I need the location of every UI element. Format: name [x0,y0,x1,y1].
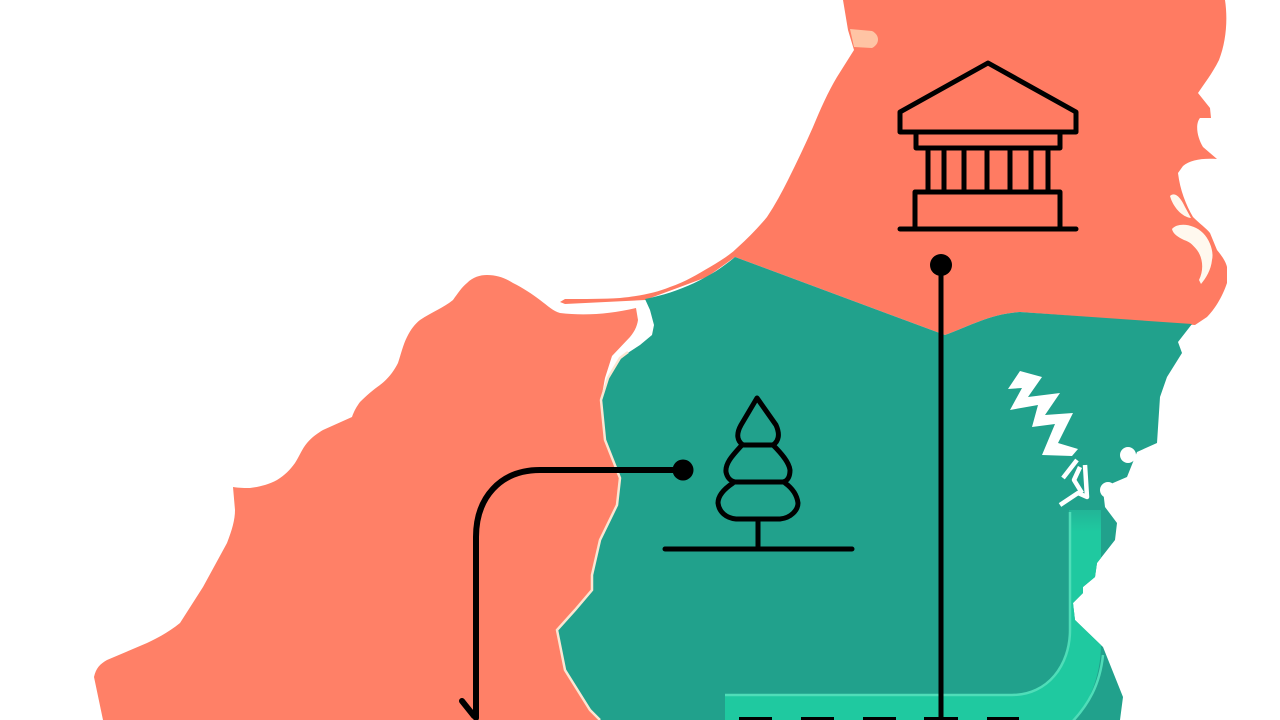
coastal dot [1120,447,1136,463]
icon: government building [900,63,1076,229]
white inlets: east coast flecks [1170,194,1213,284]
region: western coral area [94,275,638,720]
highlight: peach streak [850,29,878,48]
arrow: tree to lower left [462,460,694,718]
region: teal central area [557,257,1192,720]
icon: zigzag river [1008,371,1136,505]
coast outline [557,352,628,720]
coastal blob [1100,482,1116,498]
channel highlight [725,512,1103,720]
icon: tree [665,398,852,549]
connector: building to bottom row [930,254,952,720]
water channel [725,510,1103,720]
bottom row of blocks [739,717,1019,720]
region: northern coral area [560,0,1227,335]
